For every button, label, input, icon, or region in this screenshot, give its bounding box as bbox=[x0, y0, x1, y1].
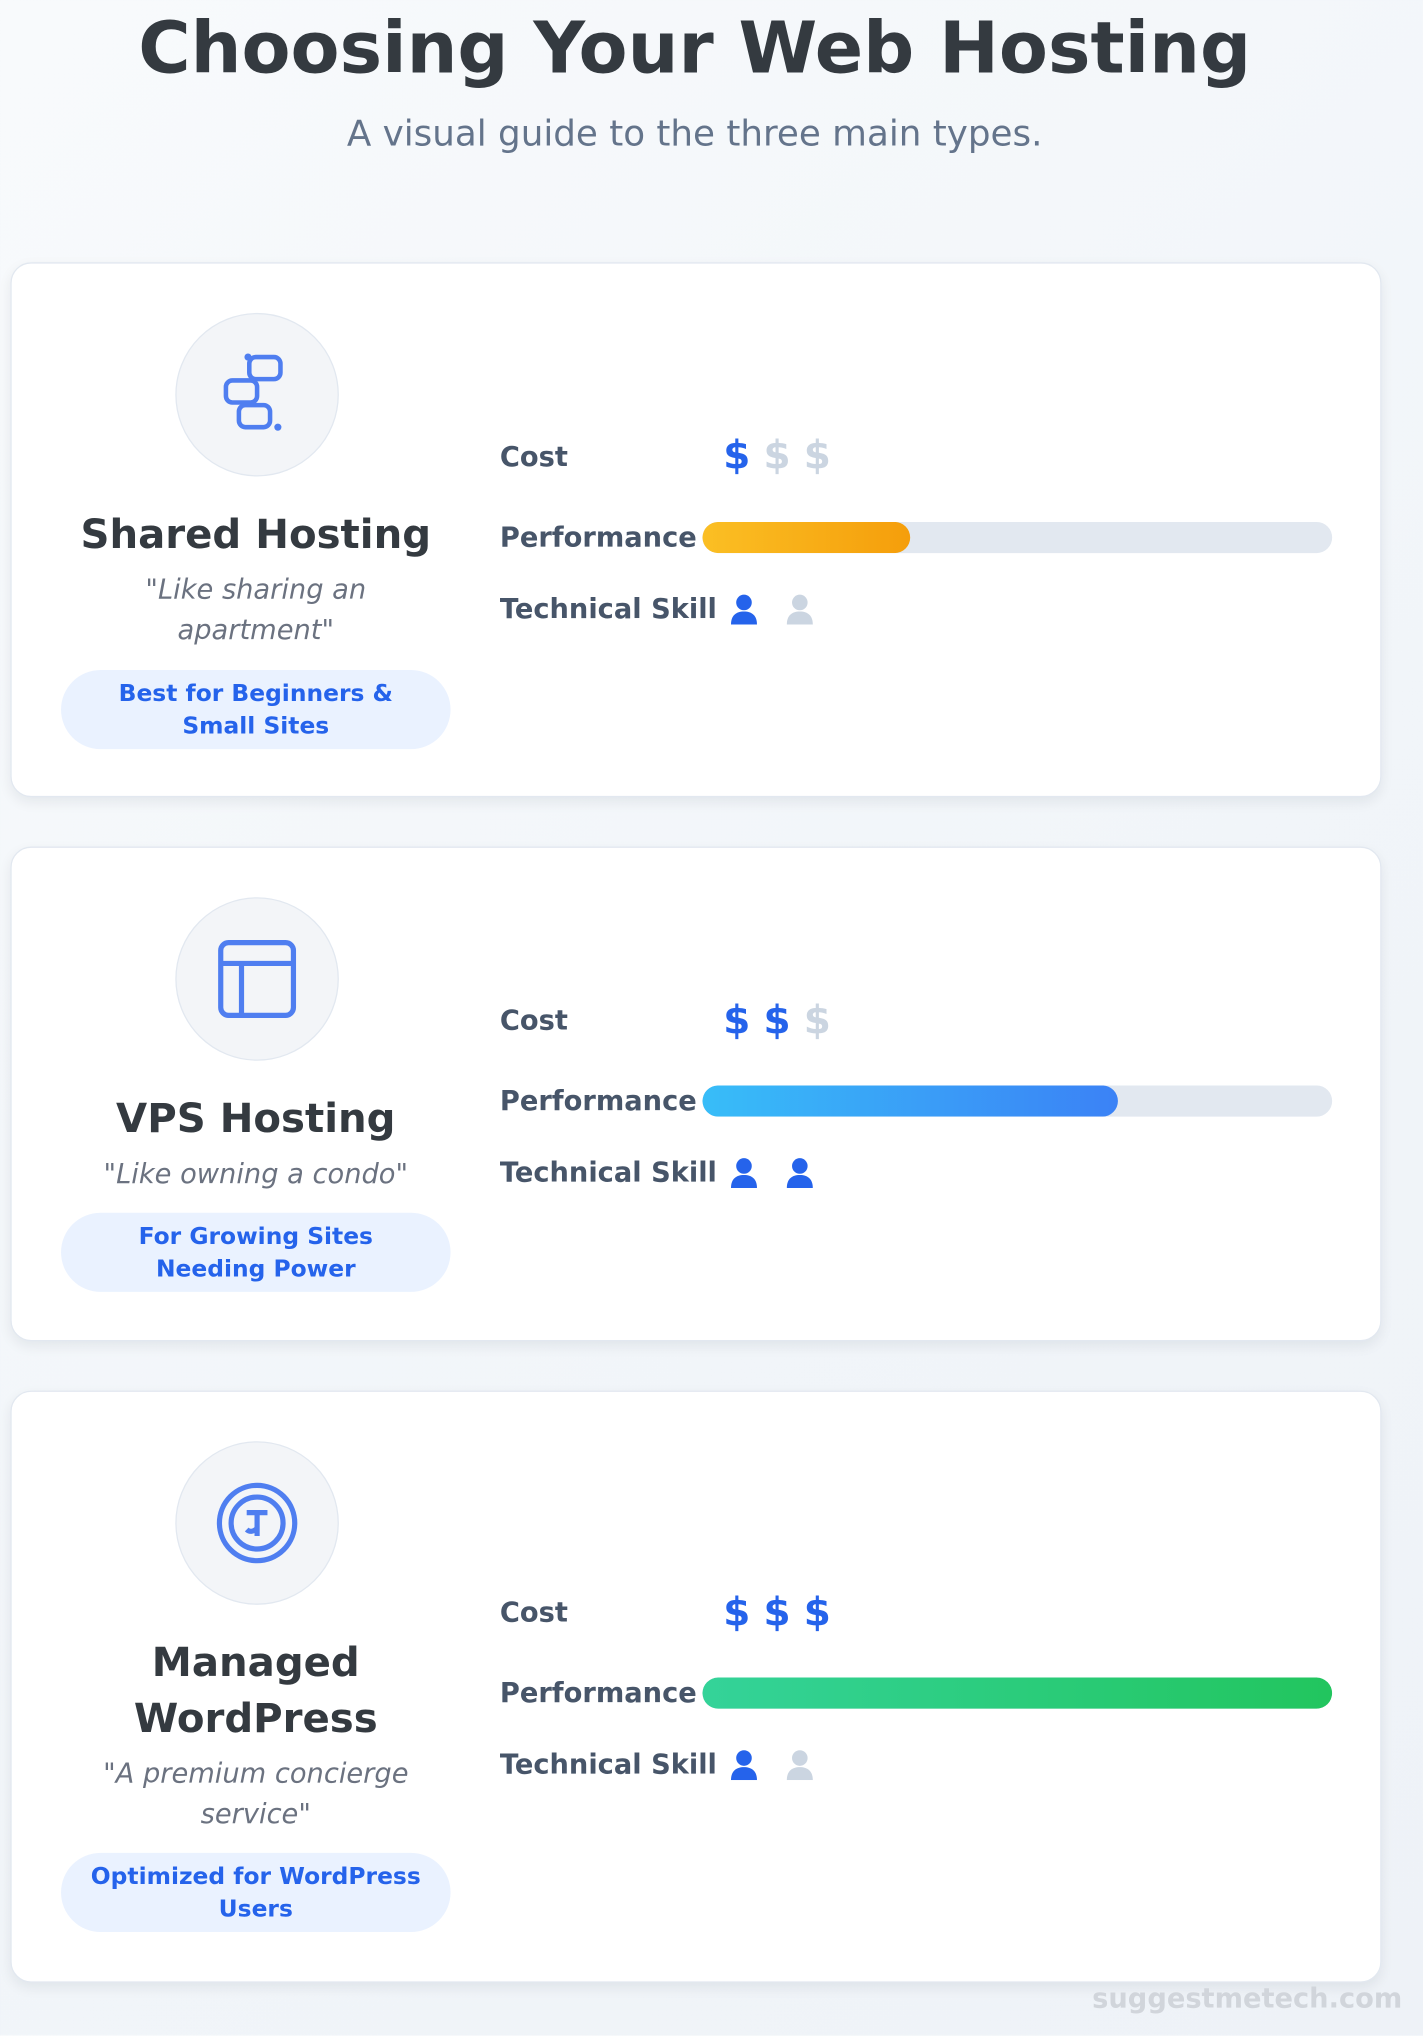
cost rating: $ bbox=[763, 434, 791, 479]
heading: VPS Hosting bbox=[116, 1096, 396, 1143]
quote: "Like owning a condo" bbox=[104, 1158, 408, 1189]
technical skill label: Technical Skill bbox=[500, 1157, 717, 1188]
cost rating: $ bbox=[804, 434, 831, 479]
badge bbox=[61, 1853, 451, 1932]
heading: Managed bbox=[152, 1640, 360, 1687]
cost label: Cost bbox=[500, 1005, 568, 1036]
performance label: Performance bbox=[500, 1085, 697, 1117]
badge: Users bbox=[219, 1895, 293, 1922]
heading: WordPress bbox=[134, 1696, 378, 1742]
cost rating bbox=[723, 1591, 831, 1636]
skill icons bbox=[731, 1158, 813, 1188]
cost rating: $ bbox=[763, 1591, 791, 1636]
icon: shared bbox=[175, 313, 339, 477]
icon: vps bbox=[175, 897, 339, 1061]
cost rating: $ bbox=[723, 998, 750, 1044]
performance bar bbox=[702, 1085, 1332, 1117]
performance label: Performance bbox=[500, 522, 697, 553]
technical skill label: Technical Skill bbox=[500, 1749, 717, 1780]
badge: Needing Power bbox=[156, 1255, 356, 1282]
subtitle: A visual guide to the three main types. bbox=[347, 113, 1042, 155]
quote: "Like sharing an apartment" bbox=[145, 574, 366, 645]
skill icons bbox=[731, 594, 813, 624]
performance bar bbox=[702, 1678, 1332, 1709]
cost label: Cost bbox=[500, 1597, 568, 1628]
cost rating bbox=[723, 434, 831, 479]
cost rating: $ bbox=[804, 998, 831, 1044]
badge: Best for Beginners & bbox=[119, 680, 393, 707]
badge bbox=[61, 1213, 451, 1292]
cost rating: $ bbox=[723, 434, 750, 479]
cost rating: $ bbox=[723, 1591, 750, 1636]
badge bbox=[61, 670, 451, 749]
heading: Shared Hosting bbox=[80, 512, 431, 558]
cost rating: $ bbox=[763, 998, 791, 1044]
panel: shared hosting bbox=[10, 262, 1381, 797]
title: Choosing Your Web Hosting bbox=[138, 6, 1251, 90]
performance bar bbox=[702, 522, 1332, 553]
footer watermark: suggestmetech.com bbox=[1092, 1983, 1402, 2014]
badge: For Growing Sites bbox=[139, 1222, 373, 1250]
technical skill label: Technical Skill bbox=[500, 593, 717, 625]
panel: managed wordpress bbox=[10, 1391, 1381, 1983]
icon: wordpress bbox=[175, 1441, 339, 1605]
quote: "A premium concierge service" bbox=[103, 1758, 408, 1829]
performance label: Performance bbox=[500, 1678, 697, 1709]
cost rating: $ bbox=[804, 1591, 831, 1636]
badge: Optimized for WordPress bbox=[91, 1863, 421, 1890]
cost label: Cost bbox=[500, 441, 568, 473]
badge: Small Sites bbox=[182, 712, 329, 739]
cost rating bbox=[723, 998, 831, 1044]
heading bbox=[134, 1640, 378, 1742]
skill icons bbox=[731, 1750, 813, 1780]
panel: vps hosting bbox=[10, 847, 1381, 1341]
